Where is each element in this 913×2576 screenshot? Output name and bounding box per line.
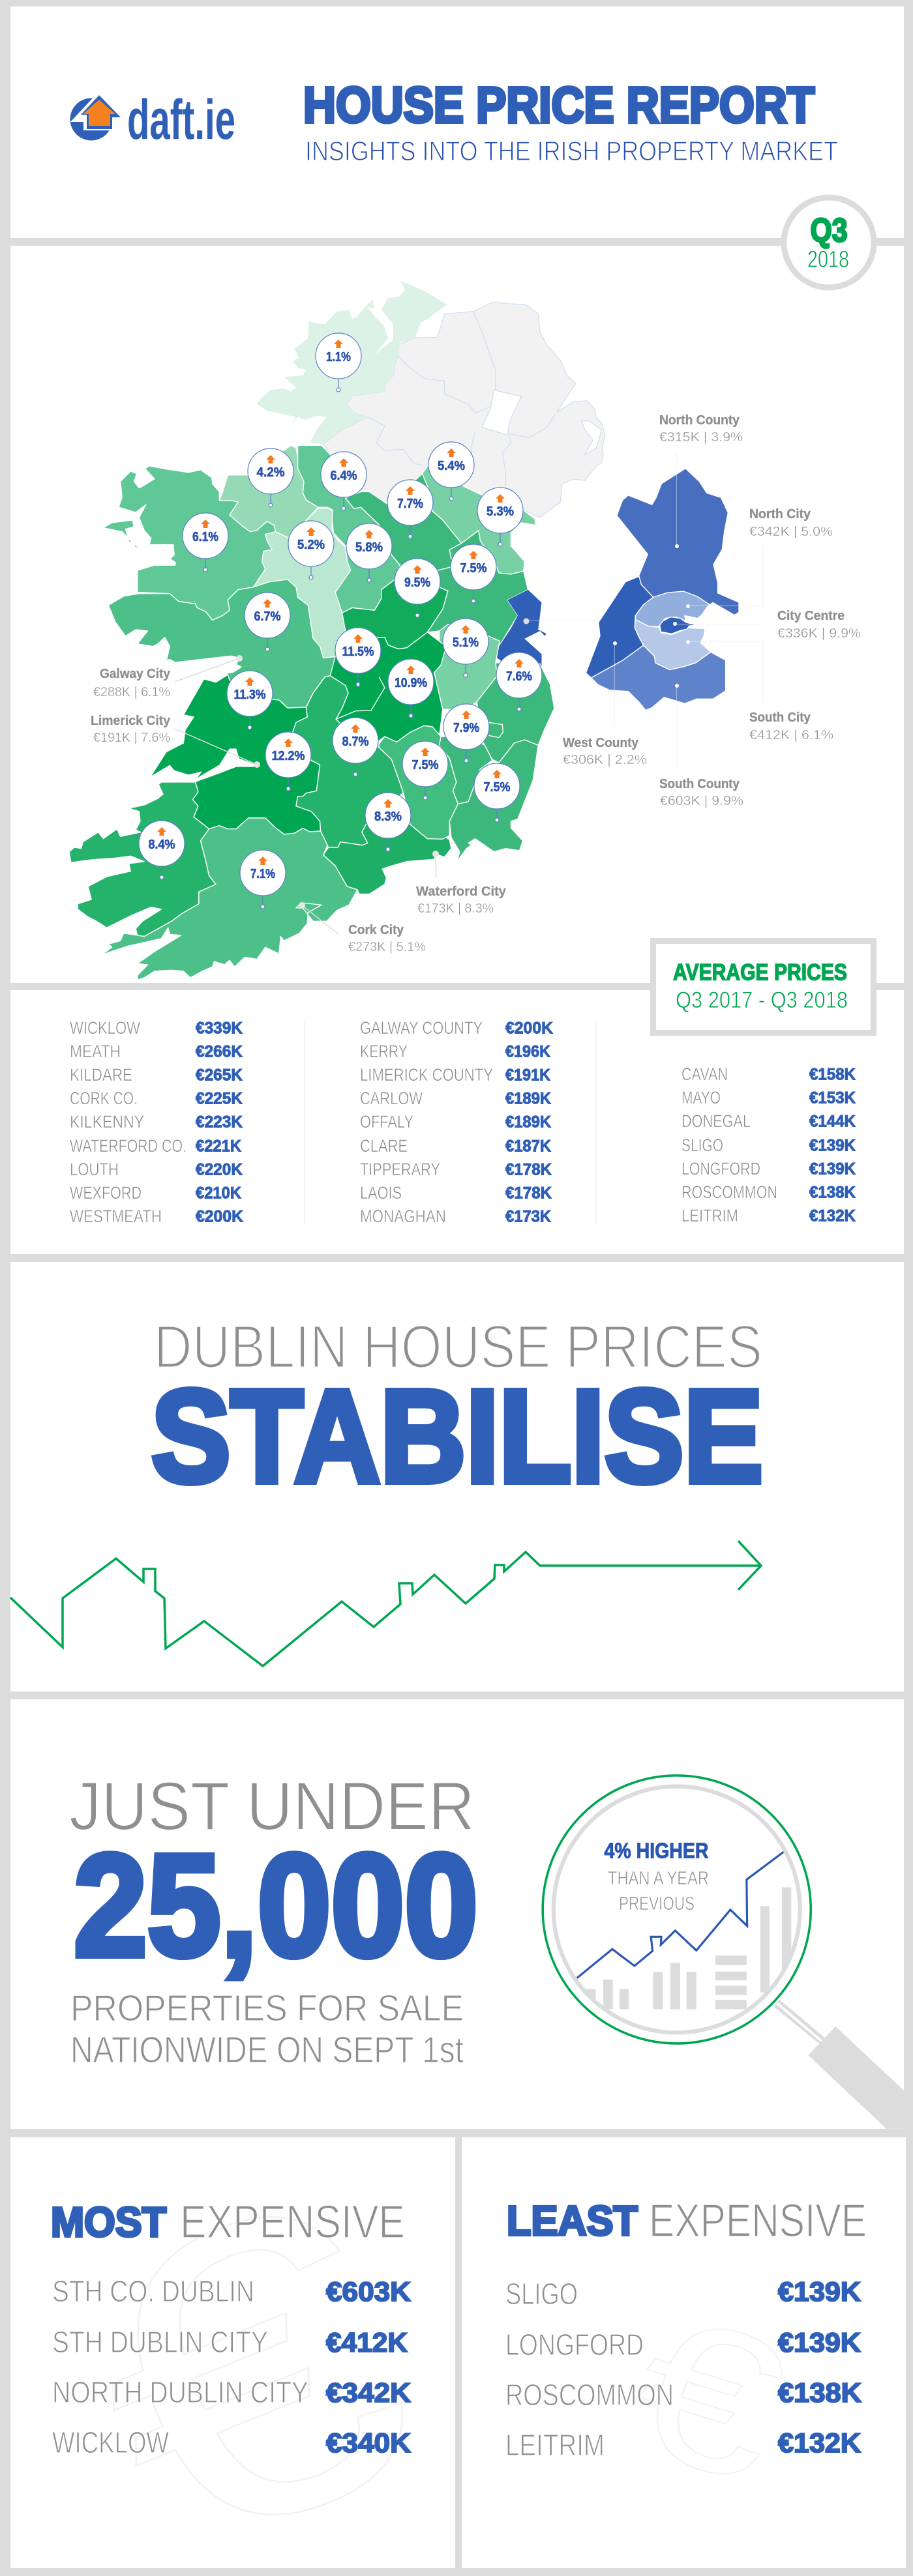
column 2: €189K <box>505 1113 551 1132</box>
heading: just under: JUST UNDER <box>69 1768 475 1845</box>
column 2: KERRY <box>360 1042 408 1061</box>
label: South County: €603K | 9.9% <box>660 794 743 808</box>
list: most expensive: €342K <box>326 2377 411 2408</box>
Lough Swilly <box>368 308 393 355</box>
label: Waterford City: Waterford City <box>416 885 507 899</box>
county: Roscommon <box>254 508 351 658</box>
heading: most expensive: EXPENSIVE <box>180 2197 405 2248</box>
county: Meath <box>427 531 528 647</box>
label: South City: €412K | 6.1% <box>749 728 833 742</box>
county: Cork <box>102 818 357 980</box>
county: Galway <box>108 579 342 708</box>
bubble: Kerry 8.4%: 8.4% <box>149 838 175 852</box>
bubble: Cork 7.1% <box>240 850 286 909</box>
county: Mayo <box>103 466 276 620</box>
heading: most expensive: MOST <box>51 2199 166 2246</box>
list: most expensive: NORTH DUBLIN CITY <box>52 2375 308 2409</box>
bubble: Clare 11.3% <box>227 671 273 729</box>
region: Northern Ireland <box>323 302 605 518</box>
column 2: TIPPERARY <box>360 1160 440 1179</box>
bubble: Roscommon 5.2%: 5.2% <box>297 538 325 552</box>
magnifier handle <box>773 1999 906 2129</box>
callout: average prices: AVERAGE PRICES <box>673 959 847 986</box>
bubble: Tipperary 8.7% <box>333 718 378 776</box>
heading: Dublin house prices: DUBLIN HOUSE PRICES <box>154 1313 762 1381</box>
column 1 <box>70 1018 243 1226</box>
bubble: Wexford 7.5% <box>474 763 520 822</box>
list: least expensive: ROSCOMMON <box>505 2378 674 2412</box>
bubble: Mayo 6.1% <box>183 513 228 572</box>
bubble: Laois 10.9% <box>388 659 434 718</box>
list: least expensive <box>505 2276 861 2462</box>
county: Kildare <box>434 624 500 709</box>
column 1: €265K <box>196 1066 243 1085</box>
bubble: Leitrim 6.4%: 6.4% <box>330 469 357 483</box>
bubble: Monaghan 5.4%: 5.4% <box>438 459 465 473</box>
column 3: €139K <box>809 1160 856 1178</box>
bubble: Limerick 12.2%: 12.2% <box>271 749 305 763</box>
column 3: €153K <box>809 1089 856 1107</box>
column 1: €220K <box>196 1160 243 1178</box>
column 2: LAOIS <box>360 1183 402 1203</box>
label: City Centre <box>777 609 861 641</box>
county: Wexford <box>449 740 538 862</box>
column 3: €138K <box>809 1184 856 1202</box>
bubble: Carlow 7.9%: 7.9% <box>453 721 479 735</box>
column 1: CORK CO. <box>70 1089 138 1108</box>
label: North City <box>749 507 833 539</box>
bubble: Roscommon 5.2% <box>288 521 334 579</box>
bubble: Monaghan 5.4% <box>428 442 474 501</box>
bubble: Kildare 5.1% <box>443 619 488 677</box>
column 1: KILKENNY <box>70 1112 144 1132</box>
column 3: ROSCOMMON <box>681 1182 777 1202</box>
callout: average prices <box>653 941 874 1032</box>
column 1: WICKLOW <box>70 1018 140 1038</box>
bubble: Sligo 4.2% <box>248 448 293 507</box>
bubble: Kildare 5.1%: 5.1% <box>453 636 479 650</box>
map: Ireland north counties <box>103 281 605 708</box>
label: West County: West County <box>563 736 639 750</box>
column 1: €339K <box>196 1019 243 1038</box>
list: most expensive: €412K <box>326 2327 408 2358</box>
bars <box>586 1887 791 2009</box>
county: Kilkenny <box>379 725 458 839</box>
icon: euro watermark: € <box>610 2269 807 2525</box>
label: West County <box>563 736 647 767</box>
county: Offaly and Laois <box>330 631 446 748</box>
bubble: Westmeath 9.5%: 9.5% <box>404 576 430 590</box>
leader: Limerick City <box>175 729 260 768</box>
label: South County <box>659 777 743 808</box>
bubble: Louth 5.3% <box>477 488 523 546</box>
column 1: WESTMEATH <box>70 1207 162 1226</box>
column 1: WEXFORD <box>70 1183 142 1203</box>
list: least expensive: €138K <box>778 2377 861 2408</box>
panel: properties for sale <box>10 1699 906 2129</box>
column 3: DONEGAL <box>681 1111 751 1131</box>
label: Cork City <box>348 923 426 954</box>
column 3: MAYO <box>681 1088 721 1107</box>
bubble: Donegal 1.1%: 1.1% <box>326 350 351 364</box>
bubble: Galway 6.7%: 6.7% <box>254 609 281 624</box>
bubble: Cavan 7.7% <box>387 480 433 538</box>
panel: most expensive <box>10 2107 464 2576</box>
bubble: Meath 7.5%: 7.5% <box>460 561 487 576</box>
text: properties for sale: PROPERTIES FOR SALE <box>70 1987 464 2029</box>
column 1: KILDARE <box>70 1065 132 1085</box>
column 1: LOUTH <box>70 1160 119 1179</box>
column 1: €225K <box>196 1090 243 1108</box>
bubble: Offaly 11.5%: 11.5% <box>342 645 374 659</box>
column 2: CARLOW <box>360 1089 423 1108</box>
icon: daft.ie logo: daft.ie <box>127 89 235 151</box>
number: 25,000: 25,000 <box>74 1824 478 1987</box>
bubble: Louth 5.3%: 5.3% <box>486 505 514 519</box>
list: most expensive: €340K <box>326 2427 411 2458</box>
label: North City: North City <box>749 507 811 521</box>
column 2: MONAGHAN <box>360 1207 446 1226</box>
line chart <box>577 1852 783 1978</box>
column 3: €144K <box>809 1112 856 1130</box>
county: Carlow <box>440 737 492 804</box>
column 2: €200K <box>505 1019 553 1038</box>
label: Galway City: €288K | 6.1% <box>93 685 170 699</box>
label: South City <box>749 710 833 742</box>
bubble: Galway 6.7% <box>245 593 290 651</box>
county: Monaghan and Louth <box>422 466 536 574</box>
column 3: LONGFORD <box>681 1159 760 1178</box>
column 3 <box>681 1064 856 1225</box>
label: Limerick City: €191K | 7.6% <box>93 731 170 745</box>
label: South City: South City <box>749 710 811 725</box>
column 2: €191K <box>505 1066 550 1085</box>
bubble: Tipperary 8.7%: 8.7% <box>342 735 369 749</box>
badge: Q3 2018: Q3 <box>810 211 848 249</box>
bubble: Longford 5.8% <box>346 523 392 582</box>
label: North County: North County <box>659 413 740 428</box>
dots <box>613 544 690 688</box>
county: Donegal <box>257 281 447 444</box>
county: Leitrim and Longford <box>298 445 400 613</box>
bubble: Wicklow 7.6%: 7.6% <box>506 669 532 684</box>
callout: 4% higher: PREVIOUS <box>619 1894 695 1914</box>
area: City Centre <box>660 617 696 634</box>
map: Dublin detail <box>523 453 763 767</box>
bubble: Kilkenny 7.5%: 7.5% <box>412 758 439 772</box>
label: Waterford City: €173K | 8.3% <box>417 901 494 916</box>
column 3: SLIGO <box>681 1135 723 1155</box>
bubble: Kilkenny 7.5% <box>402 741 448 800</box>
panel: average prices table <box>10 990 904 1254</box>
column 2: €187K <box>505 1137 551 1155</box>
list: most expensive: STH CO. DUBLIN <box>52 2274 254 2308</box>
column 2: €189K <box>505 1090 551 1108</box>
area: South County Dublin <box>591 645 726 710</box>
column 3: CAVAN <box>681 1064 728 1084</box>
column 3: €132K <box>809 1207 856 1225</box>
list: least expensive: SLIGO <box>505 2277 578 2311</box>
heading: most expensive <box>51 2197 405 2248</box>
column 2: LIMERICK COUNTY <box>360 1065 493 1085</box>
column 3: €158K <box>809 1065 856 1083</box>
column 2: GALWAY COUNTY <box>360 1018 483 1038</box>
column 2: €178K <box>505 1160 552 1178</box>
callout: 4% higher: THAN A YEAR <box>608 1868 709 1889</box>
bubble: Westmeath 9.5% <box>395 559 440 617</box>
label: Galway City: Galway City <box>100 667 171 681</box>
label: Limerick City: Limerick City <box>91 714 171 728</box>
column 1: €221K <box>196 1137 241 1155</box>
area: North City <box>635 591 709 626</box>
list: least expensive: €139K <box>778 2327 861 2358</box>
text: properties for sale: NATIONWIDE ON SEPT 1st <box>70 2029 464 2071</box>
column 1: €200K <box>196 1207 243 1225</box>
bubble: Wicklow 7.6% <box>496 652 542 711</box>
county: Tipperary <box>293 676 404 847</box>
column 1: €210K <box>196 1184 241 1202</box>
bubble: Cavan 7.7%: 7.7% <box>397 497 423 511</box>
list: least expensive: €132K <box>778 2427 861 2458</box>
bubble: Leitrim 6.4% <box>321 452 367 510</box>
heading: least expensive: EXPENSIVE <box>649 2195 867 2247</box>
label: City Centre: €336K | 9.9% <box>777 626 861 641</box>
column 3: €139K <box>809 1137 856 1155</box>
list: least expensive: €139K <box>778 2276 861 2307</box>
column 2: CLARE <box>360 1136 408 1156</box>
column 2: €173K <box>505 1207 551 1225</box>
county: Dublin <box>496 590 546 668</box>
column 2: OFFALY <box>360 1112 413 1132</box>
callout: average prices: Q3 2017 - Q3 2018 <box>676 988 848 1013</box>
label: Cork City: Cork City <box>348 923 404 937</box>
county: Westmeath <box>342 565 448 649</box>
bubble: Laois 10.9%: 10.9% <box>395 676 427 690</box>
label: City Centre: City Centre <box>777 609 845 623</box>
label: Cork City: €273K | 5.1% <box>348 940 426 954</box>
icon: magnifying glass with chart <box>543 1776 906 2129</box>
label: Galway City <box>93 667 171 699</box>
column 2: €196K <box>505 1043 550 1061</box>
leader: Waterford City <box>432 851 439 877</box>
heading: least expensive: LEAST <box>507 2197 638 2244</box>
county: Kerry <box>69 782 216 937</box>
panel: header <box>10 7 904 238</box>
bubble: Waterford 8.3%: 8.3% <box>374 810 402 824</box>
icon: daft.ie logo <box>70 89 235 151</box>
label: South County: South County <box>659 777 740 791</box>
label: Waterford City <box>416 885 507 916</box>
text: properties for sale <box>70 1987 464 2071</box>
chart: house-shaped price line with arrow <box>10 1541 761 1666</box>
county: Waterford <box>323 819 451 894</box>
list: most expensive <box>52 2274 411 2459</box>
subtitle: INSIGHTS INTO THE IRISH PROPERTY MARKET <box>305 136 838 166</box>
county: Clare and Limerick <box>130 675 321 834</box>
bubble: Clare 11.3%: 11.3% <box>233 688 266 702</box>
label: North County: €315K | 3.9% <box>659 430 743 445</box>
area: North County Dublin <box>618 469 738 615</box>
area: South City <box>635 620 711 669</box>
county: Wicklow <box>477 663 554 763</box>
county: Sligo <box>219 445 318 538</box>
leader lines <box>526 453 763 767</box>
heading: Stabilise: STABILISE <box>151 1362 763 1510</box>
label: North City: €342K | 5.0% <box>749 525 833 539</box>
Shannon estuary <box>130 748 260 783</box>
list: most expensive: €603K <box>326 2276 411 2307</box>
bubble: Cork 7.1%: 7.1% <box>250 867 275 881</box>
panel: Dublin house prices stabilise <box>10 1262 904 1691</box>
bubble: Mayo 6.1%: 6.1% <box>192 530 218 544</box>
badge: Q3 2018 <box>784 198 874 287</box>
column 1: MEATH <box>70 1042 121 1061</box>
list: most expensive: WICKLOW <box>52 2425 169 2459</box>
column 1: €266K <box>196 1043 243 1061</box>
column 1: WATERFORD CO. <box>70 1136 187 1156</box>
column 3: LEITRIM <box>681 1206 738 1225</box>
bubble: Limerick 12.2% <box>265 732 311 791</box>
callout: 4% higher <box>604 1838 709 1914</box>
label: Limerick City <box>91 714 171 745</box>
bubble: Kerry 8.4% <box>139 821 185 879</box>
area: West County Dublin <box>586 576 653 678</box>
bubble: Offaly 11.5% <box>335 628 381 686</box>
bubble: Sligo 4.2%: 4.2% <box>257 465 285 480</box>
county: Cavan <box>346 474 462 570</box>
leader: Galway City <box>175 655 243 682</box>
label: West County: €306K | 2.2% <box>563 753 647 767</box>
leader: Cork City <box>299 902 338 934</box>
heading: least expensive <box>507 2195 867 2247</box>
column 2 <box>360 1018 553 1226</box>
bubble: Carlow 7.9% <box>443 704 489 763</box>
label: North County <box>659 413 743 445</box>
column 2: €178K <box>505 1184 552 1202</box>
callout: 4% higher: 4% HIGHER <box>604 1838 709 1863</box>
column 1: €223K <box>196 1113 243 1132</box>
list: least expensive: LEITRIM <box>505 2428 605 2462</box>
title: HOUSE PRICE REPORT <box>303 77 815 133</box>
bubble: Longford 5.8%: 5.8% <box>355 540 383 555</box>
bubble: Wexford 7.5%: 7.5% <box>484 780 511 795</box>
panel: least expensive <box>462 2137 906 2568</box>
bubble: Donegal 1.1% <box>316 333 361 392</box>
list: least expensive: LONGFORD <box>505 2328 644 2362</box>
list: most expensive: STH DUBLIN CITY <box>52 2325 268 2359</box>
panel: map <box>10 246 904 983</box>
bubble: Waterford 8.3% <box>365 793 411 851</box>
bubble: Meath 7.5% <box>451 544 496 603</box>
badge: Q3 2018: 2018 <box>807 246 849 272</box>
map: Ireland south counties <box>69 624 554 980</box>
